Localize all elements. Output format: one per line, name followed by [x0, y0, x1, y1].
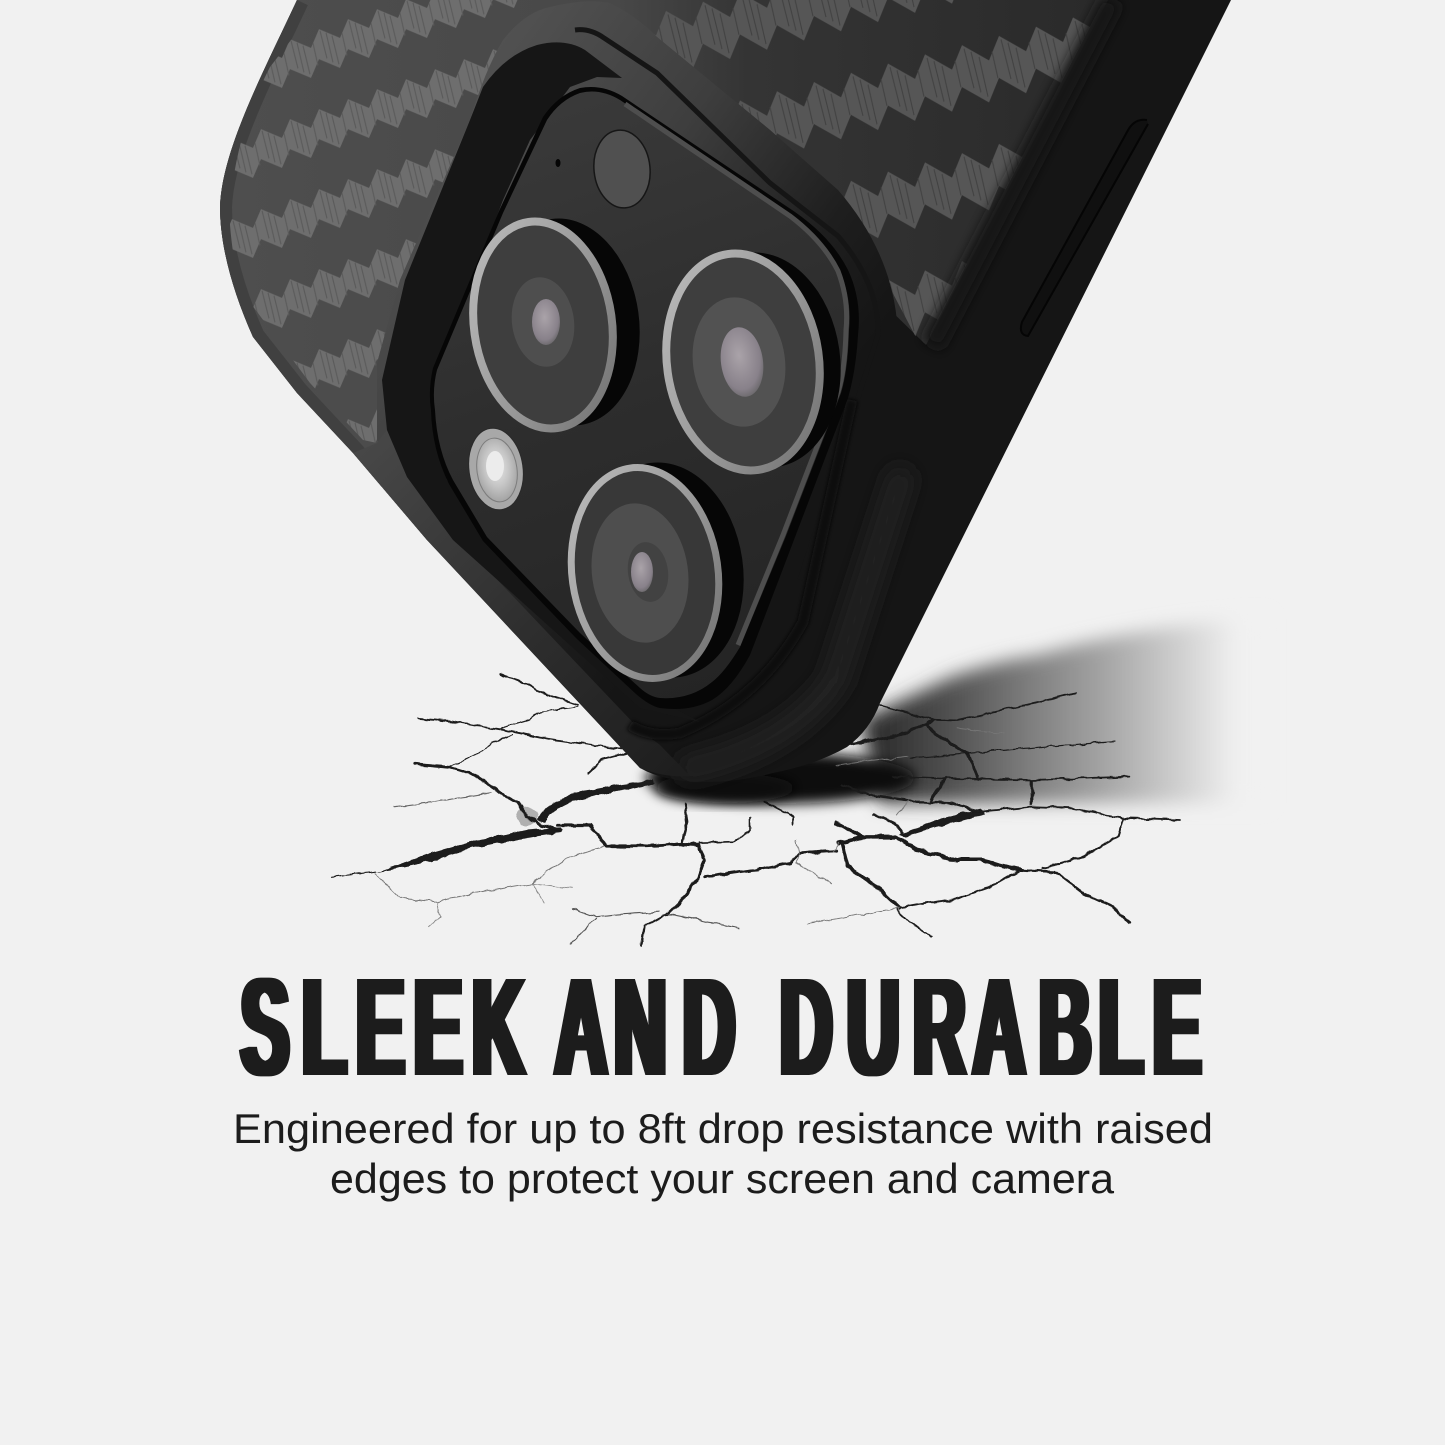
camera plate: [434, 92, 854, 698]
lens 3: [558, 452, 757, 688]
main left crack: [375, 827, 561, 873]
lower left band: [353, 430, 690, 776]
lens 1: [460, 209, 653, 438]
left carbon weave: [230, 0, 518, 442]
ground shadow: [645, 618, 1265, 804]
black crescent: [382, 42, 700, 722]
phone case: [200, 0, 1231, 782]
microphone dot: [556, 159, 560, 167]
description text: Engineered for up to 8ft drop resistance with raised: [233, 1105, 1213, 1152]
channel line: [575, 30, 878, 580]
lower dark fold: [630, 400, 852, 734]
corner highlight: [690, 480, 900, 768]
case silhouette: [220, 0, 1231, 782]
sensor: [590, 127, 654, 211]
carbon base: [200, 0, 1108, 560]
right crack: [900, 809, 985, 837]
description text: edges to protect your screen and camera: [330, 1155, 1115, 1202]
carbon right edge fade: [932, 0, 1112, 345]
right carbon weave: [655, 0, 1090, 336]
case rim: [220, 0, 427, 540]
side button: [1021, 120, 1148, 336]
heading: SLEEK AND DURABLE: [241, 948, 1201, 1105]
flash: [464, 425, 528, 513]
upper left crack: [537, 779, 654, 823]
lens 2: [653, 242, 854, 481]
plate rim highlight: [625, 104, 847, 645]
ground cracks: [331, 675, 1181, 947]
contact shadow: [655, 773, 795, 803]
camera bumper: [353, 1, 900, 776]
description text: [233, 1105, 1213, 1202]
outer gray ring: [377, 1, 897, 745]
plate surround: [430, 87, 859, 709]
